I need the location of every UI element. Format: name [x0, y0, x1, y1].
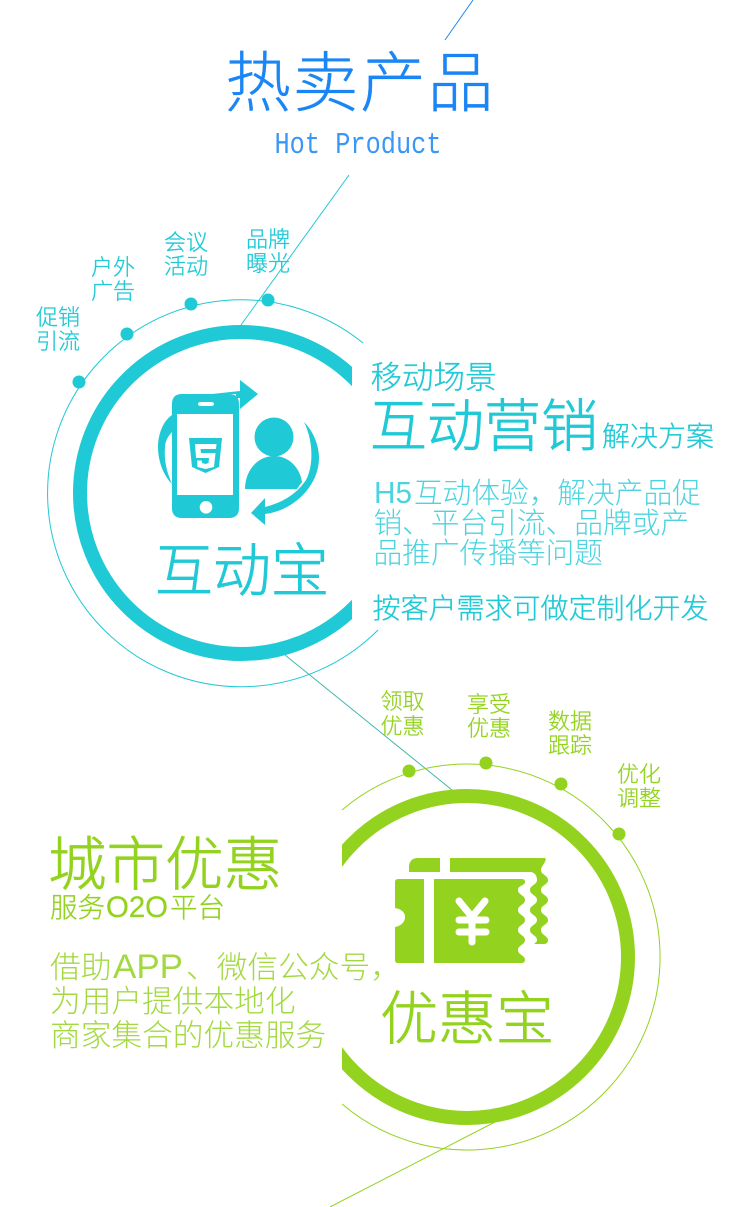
- green body copy: 、微信公众号，: [186, 950, 401, 985]
- teal headline suffix: 解决方案: [602, 421, 714, 452]
- green subheading: O2O: [106, 891, 168, 924]
- title: [225, 46, 495, 163]
- green body copy: APP: [113, 948, 183, 986]
- teal feature labels: [36, 227, 290, 354]
- teal body copy: 品推广传播等问题: [374, 538, 603, 570]
- teal eyebrow: 移动场景: [370, 359, 497, 395]
- teal feature labels: 品牌: [246, 227, 290, 252]
- thick teal ring: [80, 332, 402, 654]
- teal body copy: [374, 475, 701, 570]
- green headline: 城市优惠: [48, 833, 282, 898]
- teal feature labels: 会议: [164, 230, 208, 255]
- green feature labels: 优惠: [380, 714, 425, 739]
- teal customization note: 按客户需求可做定制化开发: [372, 593, 709, 624]
- teal feature labels: 促销: [36, 305, 80, 330]
- connector line: teal circle to green circle: [285, 655, 452, 790]
- green feature labels: 调整: [617, 786, 661, 811]
- teal body copy: H5: [374, 475, 412, 510]
- teal headline: 互动营销: [370, 395, 598, 459]
- teal product name: 互动宝: [155, 539, 329, 604]
- green feature labels: 优化: [617, 762, 661, 787]
- teal feature labels: 广告: [91, 279, 135, 304]
- subtitle: Hot Product: [274, 128, 442, 163]
- icon: phone and user: [158, 380, 319, 525]
- text block: green product description: [48, 833, 401, 1053]
- icon: coupon tickets: [395, 858, 548, 963]
- teal feature dots: [72, 294, 274, 388]
- green feature labels: 领取: [380, 689, 425, 714]
- green body copy: 借助: [50, 950, 111, 985]
- green feature labels: [380, 689, 661, 811]
- panel: teal product: [36, 227, 402, 687]
- teal body copy: 互动体验，解决产品促: [414, 478, 701, 510]
- green feature labels: 优惠: [467, 716, 511, 741]
- green feature labels: 享受: [467, 692, 511, 717]
- teal feature labels: 曝光: [246, 251, 290, 276]
- text block: teal product description: [370, 359, 714, 624]
- panel: green product: [342, 690, 661, 1150]
- teal feature labels: 活动: [164, 254, 208, 279]
- thick green ring: [306, 796, 628, 1118]
- green product name: 优惠宝: [380, 987, 554, 1052]
- green feature labels: 跟踪: [548, 733, 592, 758]
- green body copy: 为用户提供本地化: [50, 984, 296, 1019]
- green feature labels: 数据: [548, 709, 592, 734]
- connector line: title to teal circle: [241, 175, 349, 325]
- teal body copy: 销、平台引流、品牌或产: [374, 508, 689, 540]
- green subheading: [50, 891, 225, 924]
- green feature dots: [402, 756, 626, 840]
- green body copy: [50, 948, 401, 1053]
- thin teal arc: [48, 300, 378, 687]
- teal feature labels: 引流: [36, 329, 80, 354]
- green subheading: 平台: [170, 892, 225, 923]
- green subheading: 服务: [50, 892, 105, 923]
- thin green arc: [342, 764, 660, 1150]
- connector line: green circle to bottom: [330, 1122, 495, 1207]
- teal feature labels: 户外: [91, 255, 135, 280]
- green body copy: 商家集合的优惠服务: [50, 1018, 326, 1053]
- title: 热卖产品: [225, 46, 495, 120]
